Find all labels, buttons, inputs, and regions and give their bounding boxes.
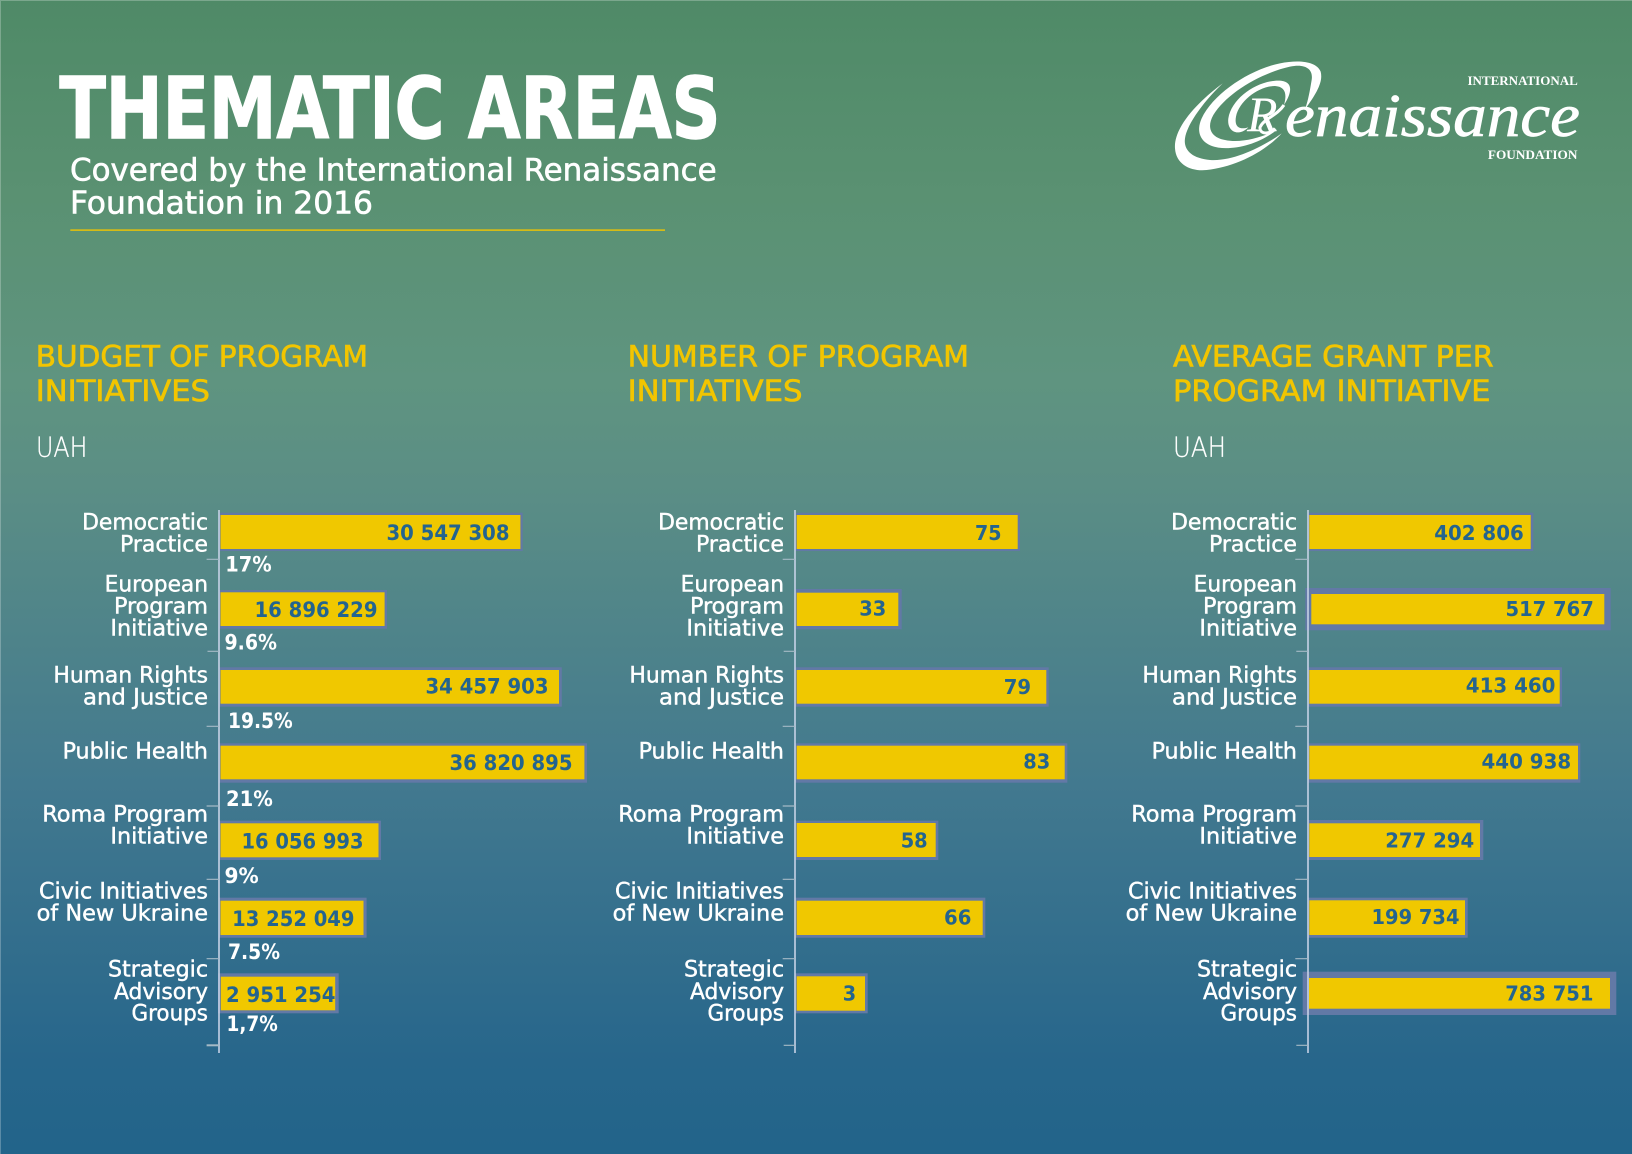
category labels: and Justice — [659, 685, 784, 710]
bar values: average grant: 402 806 — [1434, 521, 1524, 545]
category labels: Roma Program — [42, 803, 208, 828]
category labels: Program — [114, 594, 208, 620]
percentage labels — [224, 553, 293, 1036]
percentage labels: 7.5% — [228, 940, 280, 964]
bar values: number — [843, 521, 1050, 1006]
bar chart: budget — [207, 510, 587, 1053]
bar values: number: 79 — [1004, 675, 1031, 699]
subtitle: Foundation in 2016 — [70, 185, 373, 221]
percentage labels: 9.6% — [224, 630, 277, 654]
category labels: and Justice — [1172, 685, 1297, 710]
percentage labels: 9% — [224, 864, 259, 888]
bar values: budget — [226, 521, 572, 1007]
subtitle — [70, 152, 717, 221]
heading: number: NUMBER OF PROGRAM — [628, 339, 969, 373]
bar values: number: 58 — [901, 828, 928, 852]
category labels: Public Health — [63, 739, 208, 764]
bar values: number: 66 — [944, 906, 971, 930]
bar chart: average grant — [1295, 510, 1616, 1053]
category labels: Human Rights — [1142, 664, 1297, 689]
heading: number: INITIATIVES — [628, 374, 802, 408]
heading: average grant — [1173, 339, 1494, 408]
category labels: Advisory — [114, 980, 208, 1005]
category labels: Human Rights — [53, 664, 208, 689]
category labels — [37, 510, 208, 1027]
logo: International Renaissance Foundation — [1175, 61, 1580, 170]
category labels: Initiative — [1199, 617, 1297, 642]
category labels: Groups — [132, 1002, 208, 1027]
heading: average grant: PROGRAM INITIATIVE — [1173, 374, 1490, 408]
logo: International Renaissance Foundation: INTERNATIONAL — [1468, 73, 1578, 88]
bar values: budget: 16 056 993 — [242, 829, 364, 853]
logo wordmark: R — [1246, 86, 1278, 142]
bar values: number: 33 — [859, 597, 886, 621]
panel: average grant per program initiative — [1126, 339, 1616, 1053]
bar values: number: 3 — [843, 982, 856, 1006]
unit label: UAH — [36, 432, 87, 464]
percentage labels: 19.5% — [228, 709, 293, 733]
heading: budget: BUDGET OF PROGRAM — [36, 339, 368, 373]
category labels: Initiative — [686, 825, 784, 850]
bar values: budget: 34 457 903 — [426, 674, 548, 698]
category labels: Groups — [708, 1002, 784, 1027]
category labels: Civic Initiatives — [39, 880, 208, 905]
category labels: Democratic — [82, 510, 208, 535]
heading: budget — [36, 339, 368, 408]
category labels: Practice — [696, 532, 784, 557]
category labels: of New Ukraine — [613, 902, 784, 927]
bar values: average grant: 413 460 — [1466, 673, 1556, 697]
category labels: Initiative — [110, 617, 208, 642]
category labels: European — [105, 573, 208, 598]
category labels — [1126, 510, 1297, 1027]
unit label: UAH — [1173, 432, 1226, 464]
bar values: budget: 36 820 895 — [450, 751, 572, 775]
category labels: Democratic — [658, 510, 784, 535]
category labels: Practice — [1209, 532, 1297, 557]
heading: budget: INITIATIVES — [36, 374, 210, 408]
bar values: average grant: 440 938 — [1482, 750, 1571, 774]
category labels: Strategic — [1197, 958, 1297, 983]
bar values: average grant: 199 734 — [1372, 905, 1460, 929]
category labels: Program — [690, 594, 784, 620]
title: THEMATIC AREAS — [60, 60, 720, 159]
category labels: Groups — [1220, 1002, 1297, 1027]
category labels: Initiative — [1199, 825, 1297, 850]
bar values: average grant: 517 767 — [1506, 597, 1594, 621]
bar values: number: 83 — [1023, 750, 1050, 774]
category labels: European — [1194, 573, 1297, 598]
bar values: average grant: 783 751 — [1505, 982, 1594, 1006]
category labels: of New Ukraine — [37, 902, 208, 927]
bar values: budget: 16 896 229 — [254, 598, 378, 622]
category labels: European — [681, 573, 784, 598]
category labels: Public Health — [1152, 739, 1297, 764]
logo: International Renaissance Foundation: enaissance — [1285, 83, 1580, 150]
panel: number of program initiatives — [613, 339, 1067, 1053]
category labels: Human Rights — [629, 664, 784, 689]
category labels — [613, 510, 784, 1027]
bar values: budget: 2 951 254 — [226, 983, 336, 1007]
bar values: number: 75 — [975, 521, 1002, 545]
category labels: Program — [1203, 594, 1297, 620]
category labels: Strategic — [684, 958, 784, 983]
percentage labels: 1,7% — [226, 1012, 278, 1036]
bar values: budget: 30 547 308 — [386, 521, 510, 545]
bar values: average grant — [1372, 521, 1594, 1006]
logo swirl — [1175, 61, 1321, 170]
category labels: Initiative — [110, 825, 208, 850]
logo: International Renaissance Foundation: FOUNDATION — [1488, 147, 1578, 162]
heading: number — [628, 339, 969, 408]
category labels: Strategic — [108, 958, 208, 983]
bar values: budget: 13 252 049 — [232, 907, 354, 931]
category labels: of New Ukraine — [1126, 902, 1297, 927]
category labels: Advisory — [1203, 980, 1297, 1005]
bar values: average grant: 277 294 — [1385, 828, 1474, 852]
category labels: Civic Initiatives — [1128, 880, 1297, 905]
category labels: Democratic — [1171, 510, 1297, 535]
bar chart: number — [783, 510, 1067, 1053]
heading: average grant: AVERAGE GRANT PER — [1173, 339, 1494, 373]
category labels: Practice — [120, 532, 208, 557]
percentage labels: 21% — [226, 787, 273, 811]
subtitle: Covered by the International Renaissance — [70, 152, 717, 188]
category labels: Roma Program — [618, 803, 784, 828]
category labels: Public Health — [639, 739, 784, 764]
category labels: Civic Initiatives — [615, 880, 784, 905]
panel: budget of program initiatives — [36, 339, 587, 1053]
category labels: Initiative — [686, 617, 784, 642]
category labels: Roma Program — [1131, 803, 1297, 828]
percentage labels: 17% — [225, 553, 272, 577]
category labels: and Justice — [83, 685, 208, 710]
category labels: Advisory — [690, 980, 784, 1005]
